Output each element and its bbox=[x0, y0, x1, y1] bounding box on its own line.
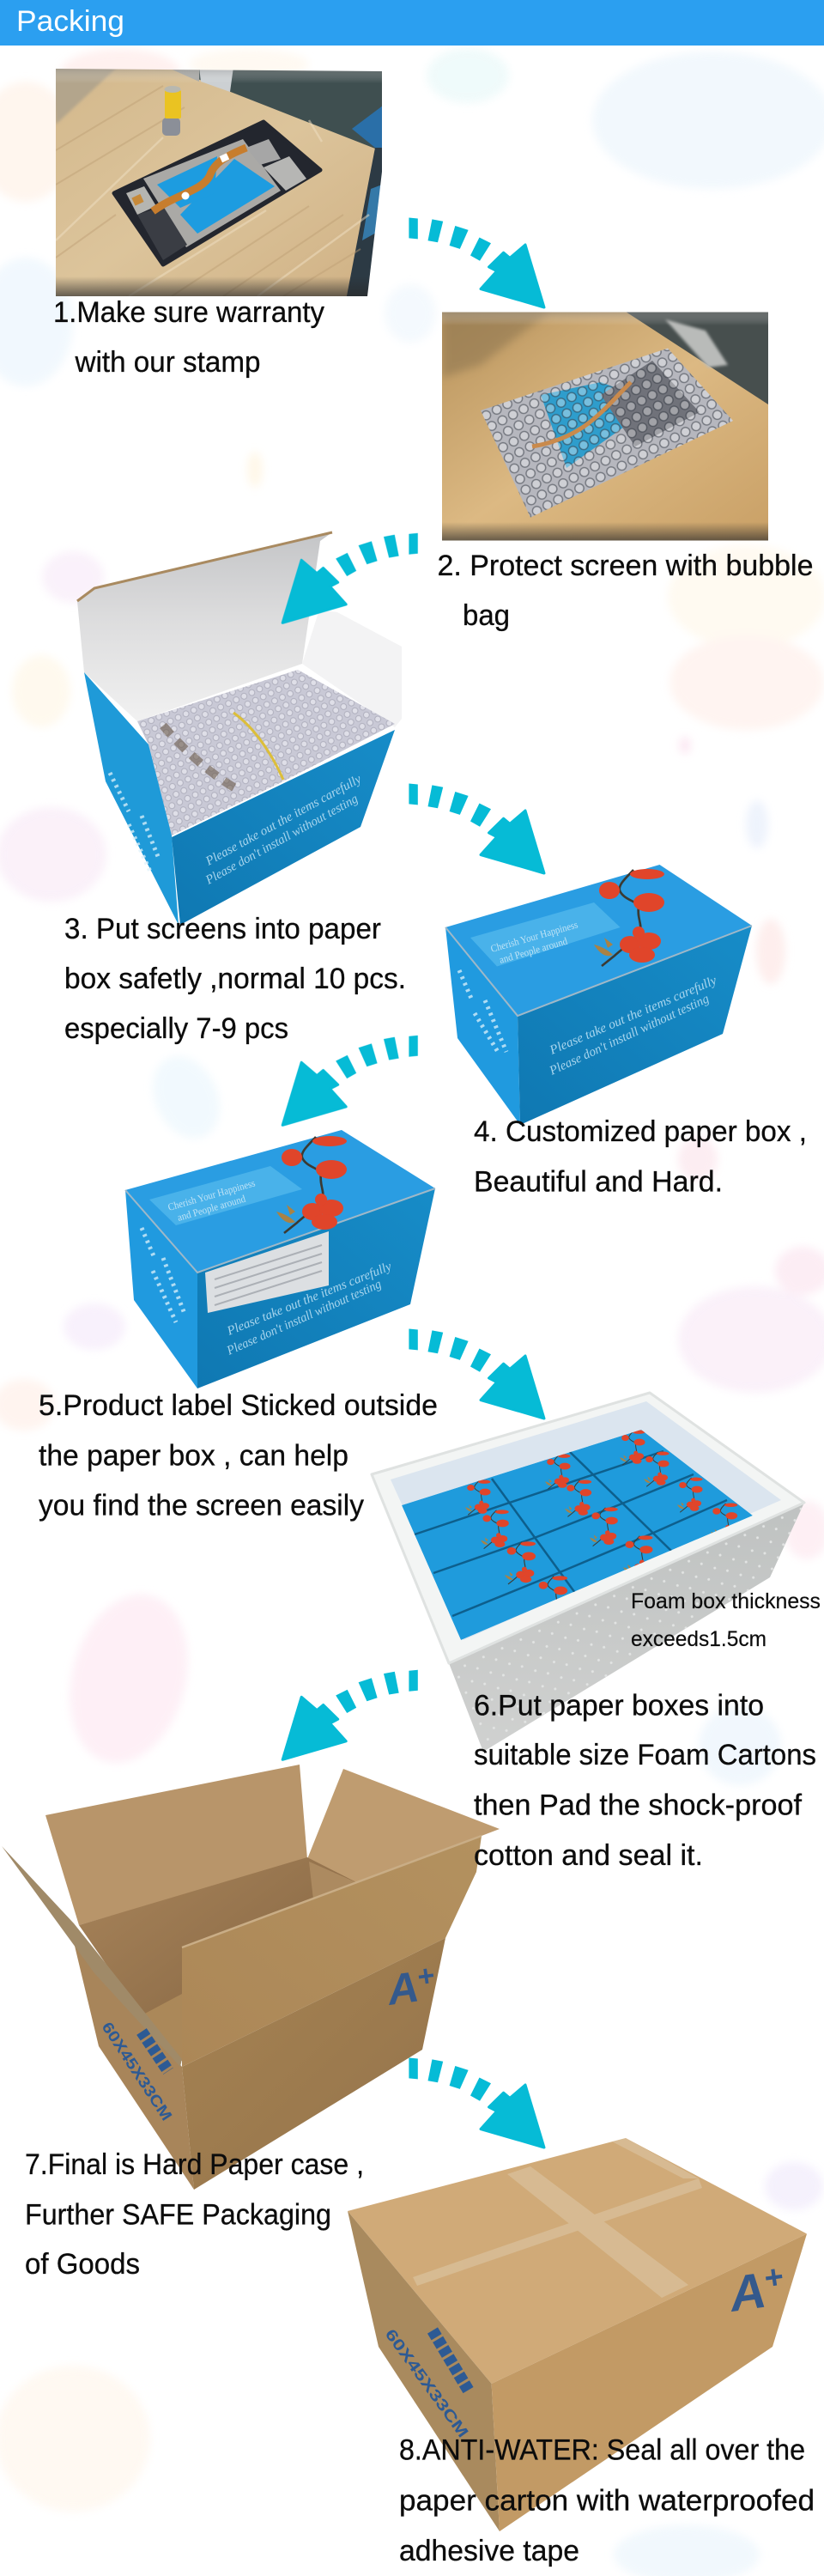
lid print text: and People around bbox=[176, 1193, 247, 1224]
step 2 text: 2. Protect screen with bubble bbox=[438, 550, 814, 582]
lid print text bbox=[489, 918, 579, 966]
right flap bbox=[307, 1769, 500, 1885]
lid print text: and People around bbox=[498, 935, 569, 966]
print: A+ mark: A bbox=[726, 2263, 769, 2323]
step 5 text: you find the screen easily bbox=[39, 1489, 364, 1522]
box print text: Please don't install without testing bbox=[547, 992, 712, 1078]
box print text: Please don't install without testing bbox=[224, 1278, 384, 1358]
step 7 text: 7.Final is Hard Paper case , bbox=[25, 2148, 364, 2181]
lid print text: Cherish Your Happiness bbox=[489, 918, 579, 955]
step 3 text: 3. Put screens into paper bbox=[64, 913, 381, 945]
front lower panel bbox=[182, 1938, 445, 2190]
step 5 text: the paper box , can help bbox=[39, 1439, 348, 1472]
arrow 5 to 6 bbox=[409, 1329, 544, 1419]
step 3 text: especially 7-9 pcs bbox=[64, 1012, 288, 1045]
print: A+ mark: + bbox=[415, 1959, 436, 1994]
step 1 text: with our stamp bbox=[75, 346, 261, 379]
photo 1: screen and warranty stamp on table bbox=[52, 64, 386, 301]
box print text: Please take out the items carefully bbox=[547, 974, 719, 1058]
lid print text: Cherish Your Happiness bbox=[167, 1176, 257, 1213]
header bar bbox=[0, 0, 824, 46]
step 5 text bbox=[39, 1389, 438, 1522]
step 1 text bbox=[53, 296, 324, 379]
left flap edge bbox=[2, 1846, 182, 2067]
step 4 text: Beautiful and Hard. bbox=[474, 1166, 723, 1199]
box 6: foam carton with paper boxes bbox=[372, 1393, 804, 1752]
step 6 text: cotton and seal it. bbox=[474, 1839, 703, 1872]
arrow 2 to 3 bbox=[282, 533, 418, 623]
arrow 1 to 2 bbox=[409, 218, 544, 307]
heading: Packing: Packing bbox=[16, 5, 124, 38]
product label bbox=[205, 1231, 329, 1313]
step 7 text: of Goods bbox=[25, 2248, 140, 2281]
inner walls bbox=[79, 1857, 358, 2061]
icon: warranty stamp bbox=[162, 86, 181, 136]
left side bbox=[74, 1942, 194, 2190]
back flap bbox=[45, 1765, 307, 1925]
step 8 text bbox=[399, 2433, 815, 2567]
step 1 text: 1.Make sure warranty bbox=[53, 296, 324, 329]
box 8: sealed carton with tape bbox=[348, 2138, 807, 2531]
flower print bbox=[276, 1136, 347, 1233]
step 6 text: suitable size Foam Cartons bbox=[474, 1739, 816, 1771]
step 8 text: 8.ANTI-WATER: Seal all over the bbox=[399, 2433, 805, 2466]
box 5: paper box with product label bbox=[125, 1130, 435, 1388]
step 6 text: then Pad the shock-proof bbox=[474, 1789, 803, 1822]
arrow 6 to 7 bbox=[282, 1670, 418, 1759]
step 2 text: bag bbox=[463, 599, 510, 632]
bubble bag bbox=[481, 349, 733, 518]
box 4: customized paper box bbox=[445, 865, 752, 1125]
print: A+ mark: A bbox=[385, 1962, 421, 2014]
box print text: Please take out the items carefully bbox=[203, 772, 364, 869]
tape strips bbox=[413, 2138, 702, 2298]
phone screen assembly bbox=[114, 122, 320, 264]
lid print text bbox=[167, 1176, 257, 1224]
step 8 text: paper carton with waterproofed bbox=[399, 2485, 815, 2518]
print: carton size: 60X45X33CM bbox=[99, 2019, 175, 2123]
foam thickness note bbox=[631, 1589, 821, 1651]
box print text: Please don't install without testing bbox=[203, 792, 360, 888]
bubble-wrapped screens bbox=[137, 670, 395, 835]
wood grain bbox=[56, 86, 369, 296]
print: A+ mark: + bbox=[761, 2259, 785, 2297]
flower print bbox=[594, 869, 664, 966]
box 7: open hard paper case bbox=[2, 1765, 500, 2190]
box 3: open paper box with screens bbox=[77, 532, 402, 925]
arrow 4 to 5 bbox=[282, 1036, 418, 1125]
foam thickness note: exceeds1.5cm bbox=[631, 1627, 766, 1651]
front upper flap bbox=[182, 1836, 482, 2067]
foam side walls bbox=[449, 1503, 804, 1752]
step 4 text: 4. Customized paper box , bbox=[474, 1115, 807, 1148]
step 3 text bbox=[64, 913, 406, 1045]
step 5 text: 5.Product label Sticked outside bbox=[39, 1389, 438, 1422]
arrow 3 to 4 bbox=[409, 783, 544, 873]
print: carton size: 60X45X33CM bbox=[382, 2326, 472, 2441]
step 7 text: Further SAFE Packaging bbox=[25, 2198, 331, 2231]
step 4 text bbox=[474, 1115, 807, 1199]
step 6 text bbox=[474, 1690, 816, 1872]
step 3 text: box safetly ,normal 10 pcs. bbox=[64, 963, 406, 995]
step 2 text bbox=[438, 550, 814, 632]
step 6 text: 6.Put paper boxes into bbox=[474, 1690, 764, 1722]
rows of paper boxes bbox=[402, 1430, 753, 1640]
photo 2: screen in bubble bag bbox=[438, 312, 772, 542]
foam thickness note: Foam box thickness bbox=[631, 1589, 821, 1613]
arrow 7 to 8 bbox=[409, 2057, 544, 2148]
step 7 text bbox=[25, 2148, 364, 2281]
step 8 text: adhesive tape bbox=[399, 2535, 579, 2567]
box print text: Please take out the items carefully bbox=[225, 1260, 394, 1339]
